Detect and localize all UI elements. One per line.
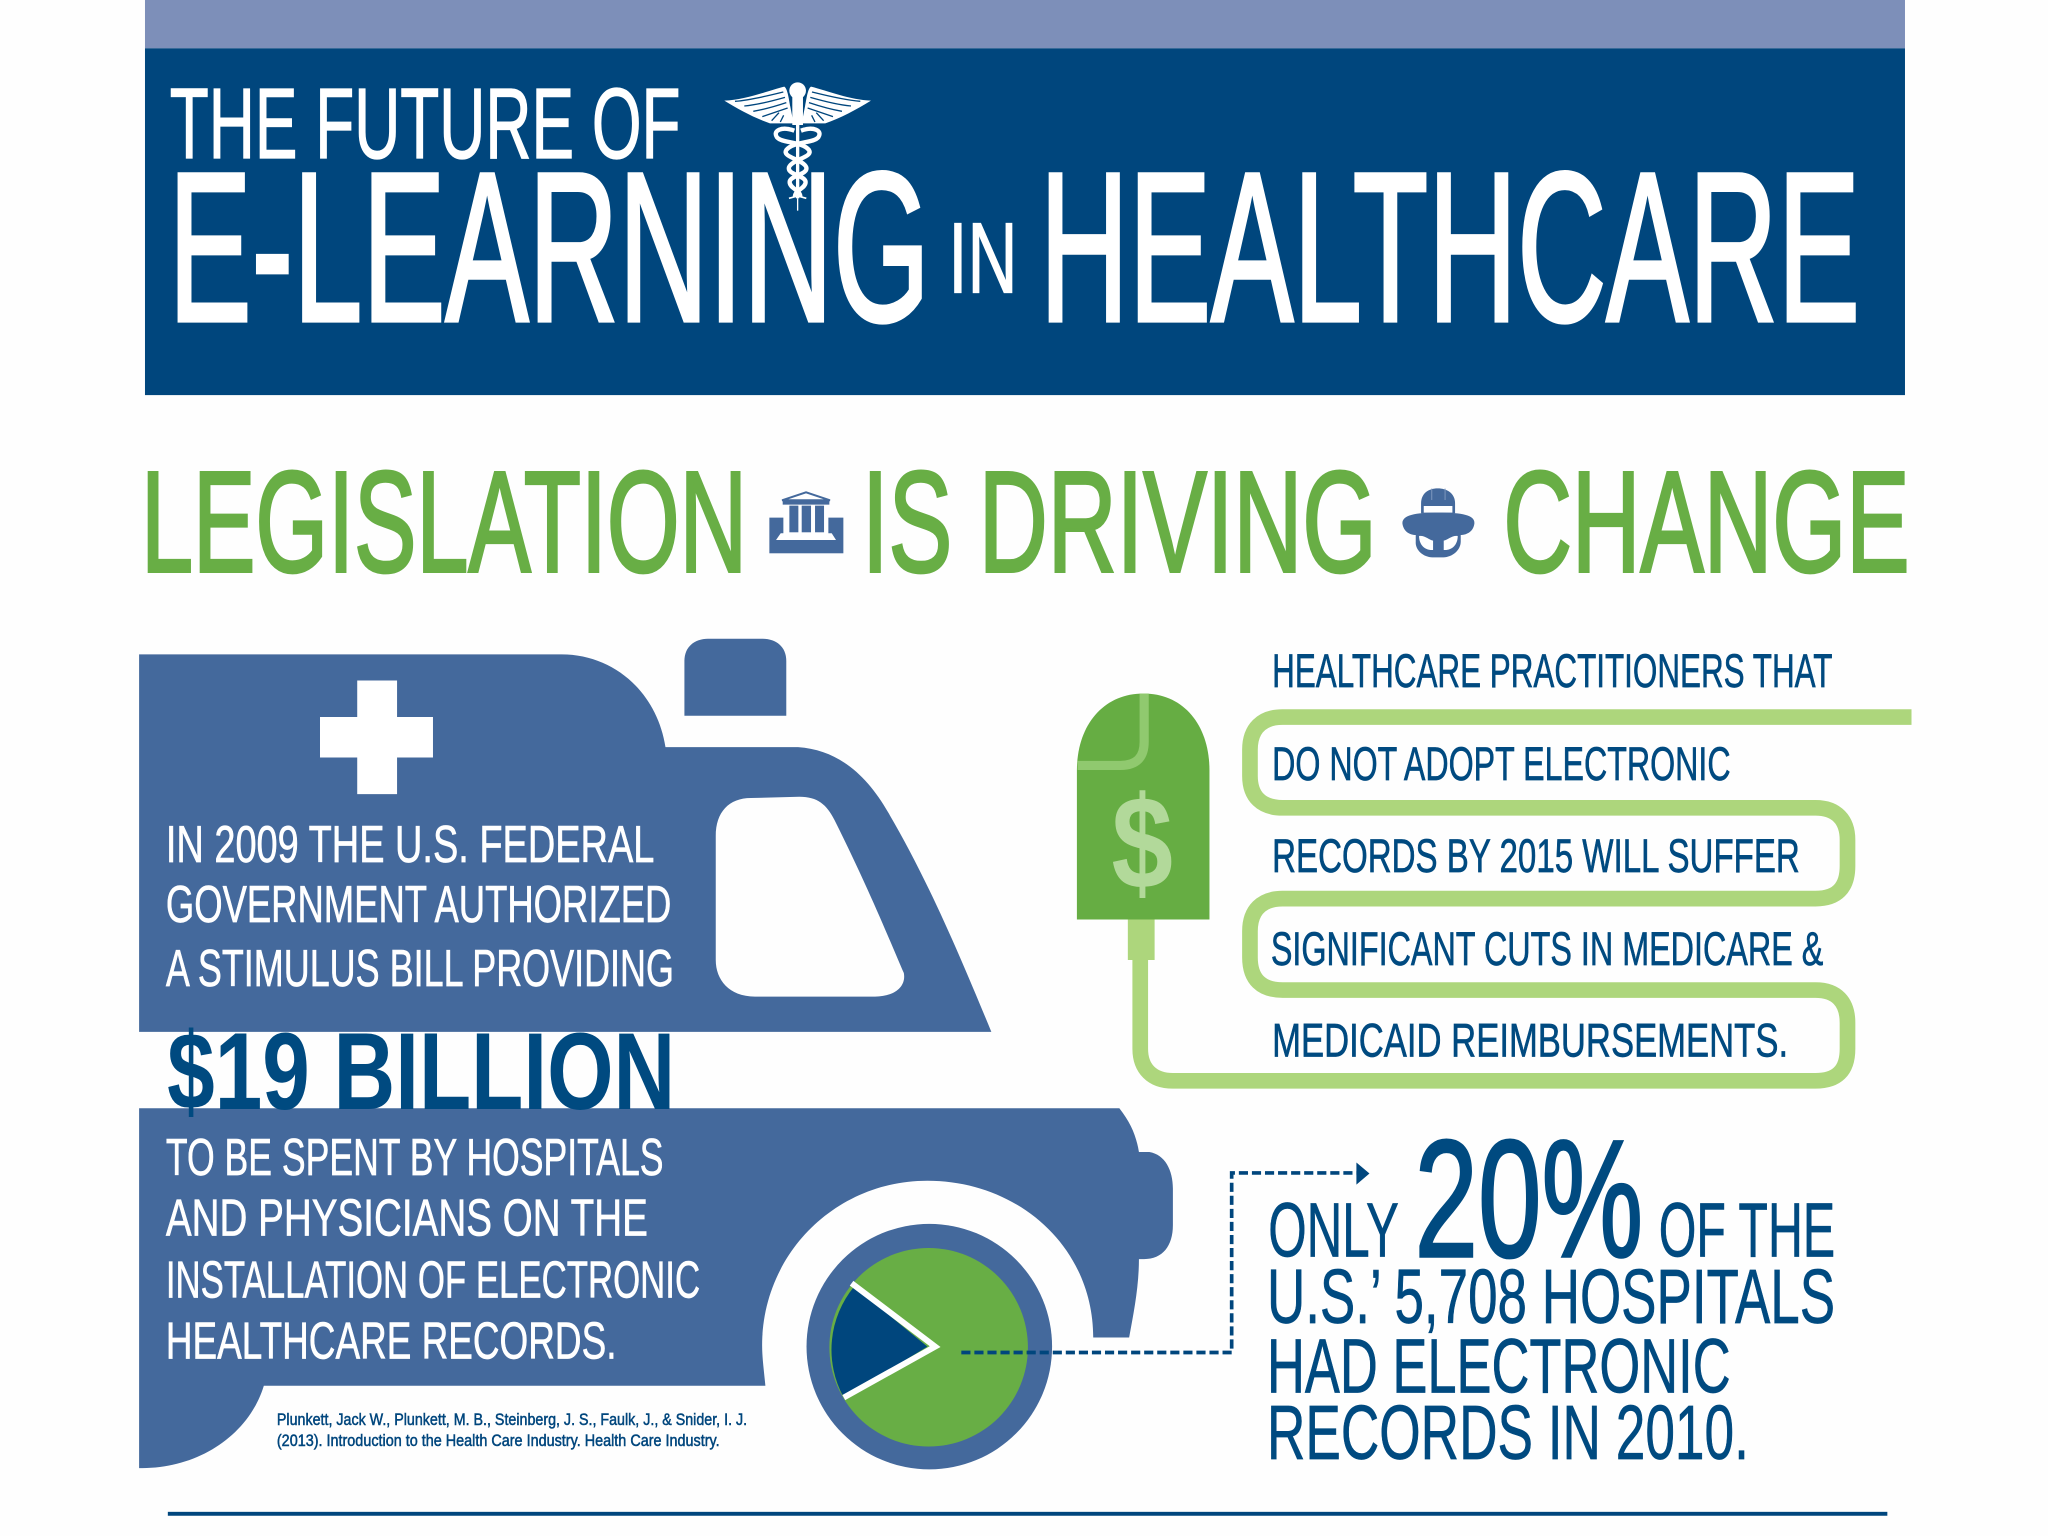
citation	[277, 1410, 747, 1450]
text: use of the funds: INSTALLATION OF ELECTRONIC	[166, 1252, 700, 1310]
ambulance body	[139, 639, 1173, 1468]
text: stimulus bill intro: IN 2009 THE U.S. FEDERAL	[166, 816, 654, 874]
icon: government building	[769, 492, 843, 553]
iv line pipe	[1140, 717, 1912, 1081]
big number: $19 billion: $19 BILLION	[167, 1011, 675, 1133]
ambulance lower body	[139, 1108, 1173, 1468]
iv bag with dollar: $	[1112, 769, 1173, 916]
icon: caduceus	[724, 82, 871, 211]
statistic: 20 percent of hospitals: HAD ELECTRONIC	[1267, 1323, 1731, 1409]
statistic: 20 percent of hospitals: 20%	[1415, 1106, 1643, 1292]
text: use of the funds: HEALTHCARE RECORDS.	[166, 1312, 616, 1370]
ambulance window	[716, 797, 904, 997]
text: use of the funds	[166, 1129, 700, 1370]
heading: legislation is driving change: IS DRIVING	[862, 442, 1377, 602]
text: medicare penalty	[1271, 644, 1832, 1067]
heading: legislation is driving change: LEGISLATION	[141, 442, 747, 602]
text: use of the funds: AND PHYSICIANS ON THE	[166, 1190, 648, 1248]
title	[168, 68, 1860, 367]
title: IN	[948, 203, 1017, 315]
text: medicare penalty: RECORDS BY 2015 WILL SUFFER	[1272, 829, 1800, 882]
ambulance beacon	[684, 639, 786, 716]
citation: (2013). Introduction to the Health Care Industry. Health Care Industry.	[277, 1431, 720, 1450]
statistic: 20 percent of hospitals: OF THE	[1659, 1187, 1835, 1273]
iv connector	[1128, 920, 1155, 960]
pie slice: 20 percent	[831, 1287, 927, 1398]
icon: physician head and stethoscope	[1402, 488, 1474, 557]
statistic: 20 percent of hospitals: RECORDS IN 2010.	[1267, 1390, 1749, 1476]
title: THE FUTURE OF	[170, 68, 680, 180]
statistic: 20 percent of hospitals	[1267, 1106, 1835, 1476]
header band	[145, 0, 1905, 395]
text: use of the funds: TO BE SPENT BY HOSPITALS	[166, 1129, 664, 1187]
bottom rule	[168, 1512, 1887, 1516]
icon: white cross	[320, 680, 433, 794]
text: stimulus bill intro: GOVERNMENT AUTHORIZED	[166, 876, 671, 934]
title: E-LEARNING	[168, 129, 930, 367]
ambulance upper cab	[139, 654, 991, 1032]
text: stimulus bill intro	[166, 816, 674, 998]
wheel pie chart: 20 percent	[807, 1224, 1052, 1469]
text: medicare penalty: MEDICAID REIMBURSEMENTS.	[1272, 1014, 1788, 1067]
text: medicare penalty: DO NOT ADOPT ELECTRONIC	[1272, 737, 1731, 790]
statistic: 20 percent of hospitals: ONLY	[1268, 1187, 1399, 1273]
dashed arrow from wheel to statistic	[961, 1162, 1369, 1352]
text: stimulus bill intro: A STIMULUS BILL PROVIDING	[166, 940, 674, 998]
heading: legislation is driving change	[141, 442, 1910, 602]
iv bag with dollar	[1077, 694, 1209, 920]
citation: Plunkett, Jack W., Plunkett, M. B., Steinberg, J. S., Faulk, J., & Snider, I. J.	[277, 1410, 747, 1429]
